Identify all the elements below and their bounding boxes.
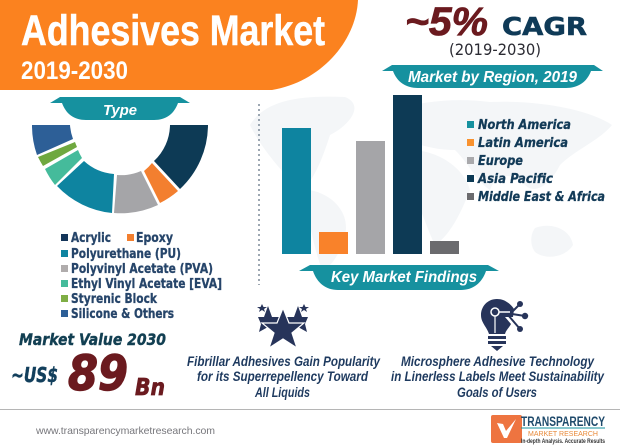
header: orange title panel xyxy=(0,0,358,90)
title: Adhesives Market xyxy=(21,7,325,55)
region legend: Asia Pacific xyxy=(477,172,553,187)
type legend: Styrenic Block xyxy=(71,292,157,307)
bar: asia pacific xyxy=(393,95,422,254)
subtitle years: 2019-2030 xyxy=(21,57,128,85)
finding text: fibrillar adhesives: Fibrillar Adhesives Gain Popularity xyxy=(187,353,381,369)
finding text: fibrillar adhesives: All Liquids xyxy=(254,384,310,400)
segment: polyurethane xyxy=(57,161,114,213)
donut chart: type xyxy=(32,125,208,213)
region legend: Europe xyxy=(478,154,523,169)
CAGR callout xyxy=(405,0,587,59)
type legend: Ethyl Vinyl Acetate [EVA] xyxy=(71,277,222,292)
banner: market by region xyxy=(382,65,603,88)
region legend xyxy=(467,118,605,205)
region legend: North America xyxy=(478,118,571,133)
finding text: microsphere adhesive xyxy=(391,353,605,400)
website url: www.transparencymarketresearch.com xyxy=(35,425,215,437)
icon: light bulb with network xyxy=(481,299,528,351)
market value callout: Market Value 2030 xyxy=(19,330,166,349)
type legend: Polyurethane (PU) xyxy=(71,247,181,262)
segment: polyvinyl acetate xyxy=(114,171,158,213)
world map background xyxy=(250,97,612,270)
segment: acrylic xyxy=(154,125,208,189)
segment: epoxy xyxy=(144,163,178,203)
bar: europe xyxy=(356,141,385,254)
type legend: Acrylic xyxy=(71,231,111,246)
CAGR callout: ~5% xyxy=(405,0,488,44)
banner: type: Type xyxy=(103,102,137,119)
CAGR callout: (2019-2030) xyxy=(449,40,541,59)
market value callout xyxy=(11,330,166,402)
icon: stars xyxy=(257,304,309,348)
banner: key market findings xyxy=(299,265,499,290)
market value callout: ~US$ xyxy=(11,363,58,387)
banner: type xyxy=(50,97,190,120)
segment: silicone and others xyxy=(32,125,73,155)
bar: north america xyxy=(282,128,311,254)
bar chart: region xyxy=(282,95,459,254)
market value callout: 89 xyxy=(68,346,128,402)
finding text: fibrillar adhesives xyxy=(187,353,381,400)
market value callout: Bn xyxy=(135,375,165,401)
type legend: Polyvinyl Acetate (PVA) xyxy=(71,262,213,277)
type legend xyxy=(61,231,222,322)
bar: latin america xyxy=(319,232,348,254)
logo: transparency market research xyxy=(491,414,606,445)
finding text: fibrillar adhesives: for its Superrepellency Toward xyxy=(197,368,368,384)
footer rule xyxy=(0,408,620,410)
segment: ethyl vinyl acetate xyxy=(45,150,82,185)
finding text: microsphere adhesive: Goals of Users xyxy=(457,384,537,400)
banner: market by region: Market by Region, 2019 xyxy=(408,69,577,86)
banner: key market findings: Key Market Findings xyxy=(331,269,477,286)
logo: transparency market research: MARKET RESEARCH xyxy=(528,429,598,438)
logo: transparency market research: In-depth Analysis. Accurate Results xyxy=(521,439,606,445)
segment: styrenic block xyxy=(38,142,77,166)
dotted divider xyxy=(258,104,260,285)
bar: middle east and africa xyxy=(430,241,459,254)
CAGR callout: CAGR xyxy=(502,12,587,41)
region legend: Latin America xyxy=(478,136,568,151)
type legend: Epoxy xyxy=(136,231,173,246)
type legend: Silicone & Others xyxy=(71,307,174,322)
